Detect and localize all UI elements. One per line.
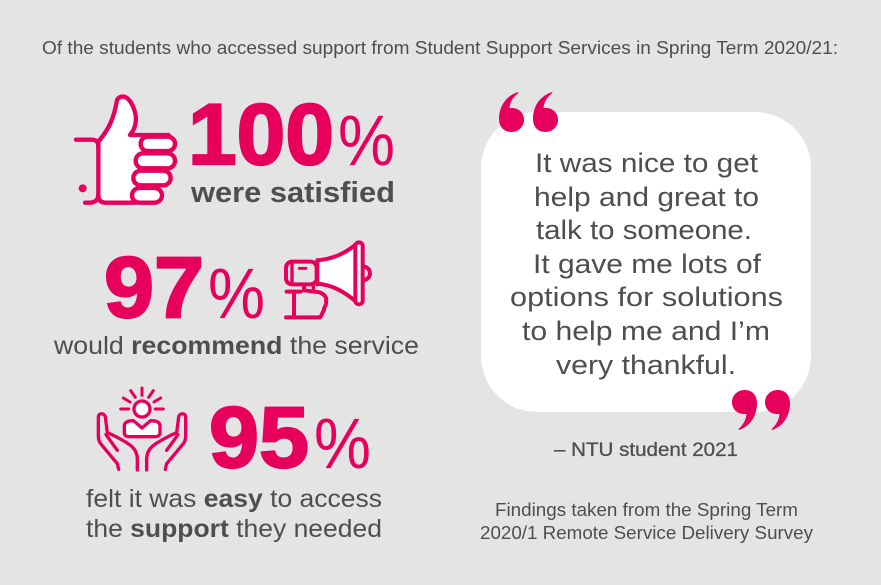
stat: percent sign: % <box>208 255 265 334</box>
stat: percent sign: % <box>338 102 395 181</box>
source note: Findings taken from the Spring Term <box>495 500 798 520</box>
caption: were satisfied: were satisfied <box>190 177 395 209</box>
attribution: – NTU student 2021 <box>554 439 738 461</box>
caption line 1: felt it was easy to access <box>86 485 382 513</box>
stat: 100: 100 <box>188 87 334 183</box>
icon: opening quotation marks <box>499 92 558 132</box>
icon: hands holding person <box>98 388 186 470</box>
quote text: options for solutions <box>510 282 783 312</box>
quote text: help and great to <box>534 182 759 212</box>
title: Of the students who accessed support from Student Support Services in Spring Term 2020/21: <box>42 38 838 58</box>
speech bubble background <box>481 112 811 412</box>
stat: percent sign: % <box>314 405 371 484</box>
quote text <box>510 148 783 380</box>
quote text: very thankful. <box>556 350 736 380</box>
quote text: to help me and I’m <box>522 316 770 346</box>
caption line 2: the support they needed <box>86 515 382 543</box>
icon: closing quotation marks <box>732 390 790 430</box>
panel: quote bubble <box>481 92 811 430</box>
quote text: talk to someone. <box>536 215 752 245</box>
panel: 95% easy to access <box>86 388 382 543</box>
quote text: It was nice to get <box>535 148 759 178</box>
icon: thumbs up <box>76 97 175 203</box>
stat: 95: 95 <box>209 390 309 486</box>
source note <box>480 500 813 543</box>
source note: 2020/1 Remote Service Delivery Survey <box>480 523 813 543</box>
icon: megaphone in hand <box>286 242 370 317</box>
panel: 97% recommend <box>53 240 419 360</box>
caption: would recommend the service: would recommend the service <box>53 332 419 360</box>
quote text: It gave me lots of <box>533 249 762 279</box>
panel: 100% satisfied <box>76 87 395 209</box>
stat: 97: 97 <box>104 240 204 336</box>
